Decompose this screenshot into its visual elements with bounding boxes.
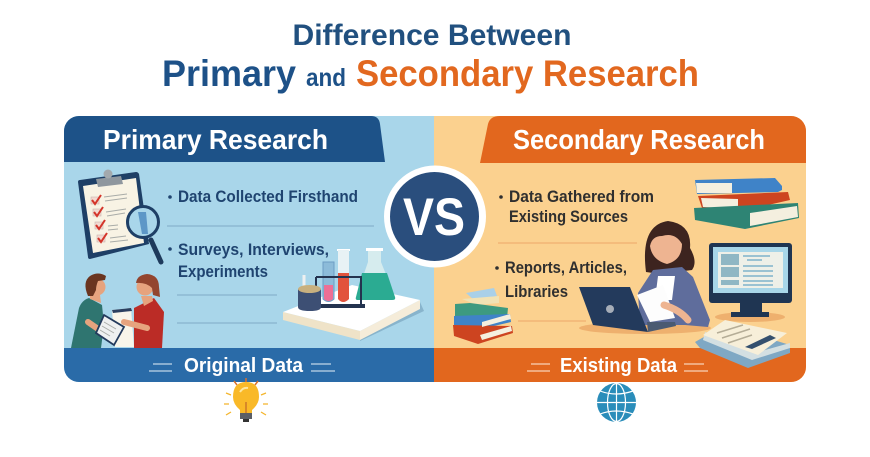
bottom bar: original data: Original Data (184, 355, 304, 377)
title: Secondary Research (356, 53, 699, 94)
panel: secondary research (434, 116, 808, 382)
illustration: two people (71, 274, 164, 348)
vs badge (384, 166, 486, 268)
vs badge: VS (403, 188, 465, 247)
text: surveys, interviews, experiments: Surveys, Interviews, (178, 241, 329, 259)
bottom bar: original data (64, 348, 434, 382)
text: data gathered from existing sources: Data Gathered from (509, 188, 654, 206)
woman (124, 274, 164, 348)
text: surveys, interviews, experiments (168, 241, 329, 281)
icon: clipboard with magnifier (78, 170, 161, 262)
illustration: lab equipment (283, 248, 424, 341)
title: and (306, 64, 346, 92)
title: Difference Between (292, 19, 572, 52)
title (162, 19, 699, 94)
header: primary research: Primary Research (103, 124, 328, 155)
man (71, 274, 106, 348)
icon: light bulb (224, 378, 268, 422)
text: reports, articles, libraries: Libraries (505, 283, 568, 301)
icon: globe (597, 383, 636, 422)
illustration: computer monitor (709, 243, 792, 322)
header: primary research (63, 116, 385, 162)
text: reports, articles, libraries: Reports, Articles, (505, 259, 627, 277)
text: data gathered from existing sources: Existing Sources (509, 208, 628, 226)
title: Primary (162, 53, 296, 94)
bottom bar: existing data: Existing Data (560, 355, 678, 377)
text: reports, articles, libraries (495, 261, 626, 297)
header: secondary research (480, 116, 808, 163)
text: data collected firsthand: Data Collected Firsthand (178, 188, 358, 206)
text: data gathered from existing sources (499, 188, 654, 226)
illustration: open book and magazine (695, 320, 790, 368)
text: surveys, interviews, experiments: Experiments (178, 263, 268, 281)
bottom bar: existing data (434, 320, 806, 382)
header: secondary research: Secondary Research (513, 124, 765, 155)
illustration: stack of books left (453, 288, 513, 344)
illustration: woman with laptop (579, 221, 711, 334)
panel: primary research (63, 116, 434, 382)
illustration: stack of books top right (694, 178, 799, 229)
text: data collected firsthand (168, 190, 357, 202)
